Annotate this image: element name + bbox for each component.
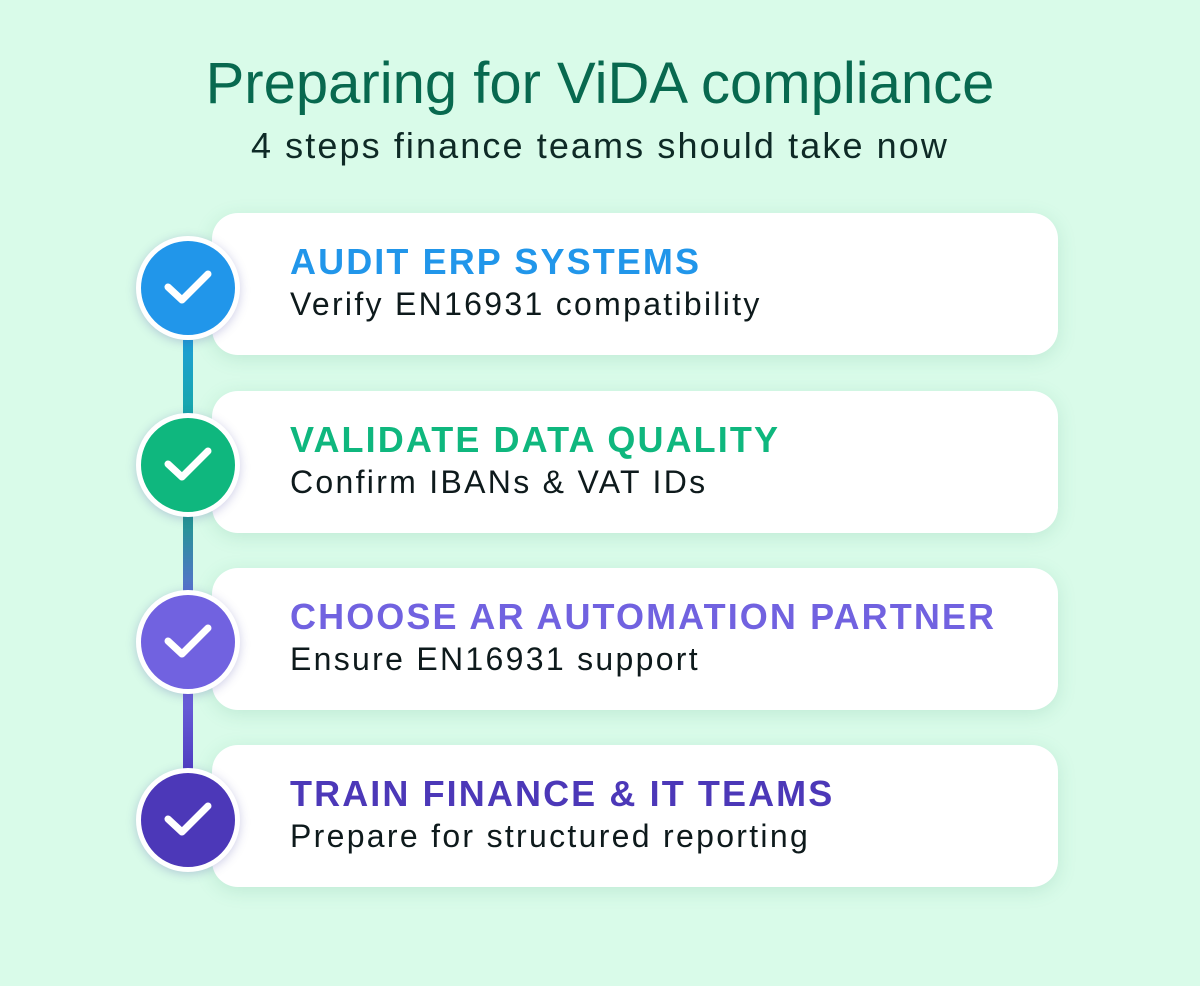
card 4: Prepare for structured reporting xyxy=(290,818,810,854)
card 3: CHOOSE AR AUTOMATION PARTNER xyxy=(290,596,996,637)
card 1: AUDIT ERP SYSTEMS xyxy=(290,241,701,282)
card 2: VALIDATE DATA QUALITY xyxy=(290,419,780,460)
connector line 1 xyxy=(183,340,193,420)
card 4 xyxy=(212,745,1058,887)
connector line 3 xyxy=(183,690,193,770)
icon: check green xyxy=(136,413,240,517)
card 2: Confirm IBANs & VAT IDs xyxy=(290,464,707,500)
card 4: TRAIN FINANCE & IT TEAMS xyxy=(290,773,834,814)
subtitle: 4 steps finance teams should take now xyxy=(251,125,949,166)
card 3: Ensure EN16931 support xyxy=(290,641,700,677)
icon: check purple xyxy=(136,768,240,872)
connector line 2 xyxy=(183,515,193,595)
icon: check violet xyxy=(136,590,240,694)
icon: check blue xyxy=(136,236,240,340)
title: Preparing for ViDA compliance xyxy=(206,51,994,116)
card 2 xyxy=(212,391,1058,533)
card 1 xyxy=(212,213,1058,355)
card 3 xyxy=(212,568,1058,710)
card 1: Verify EN16931 compatibility xyxy=(290,286,762,322)
